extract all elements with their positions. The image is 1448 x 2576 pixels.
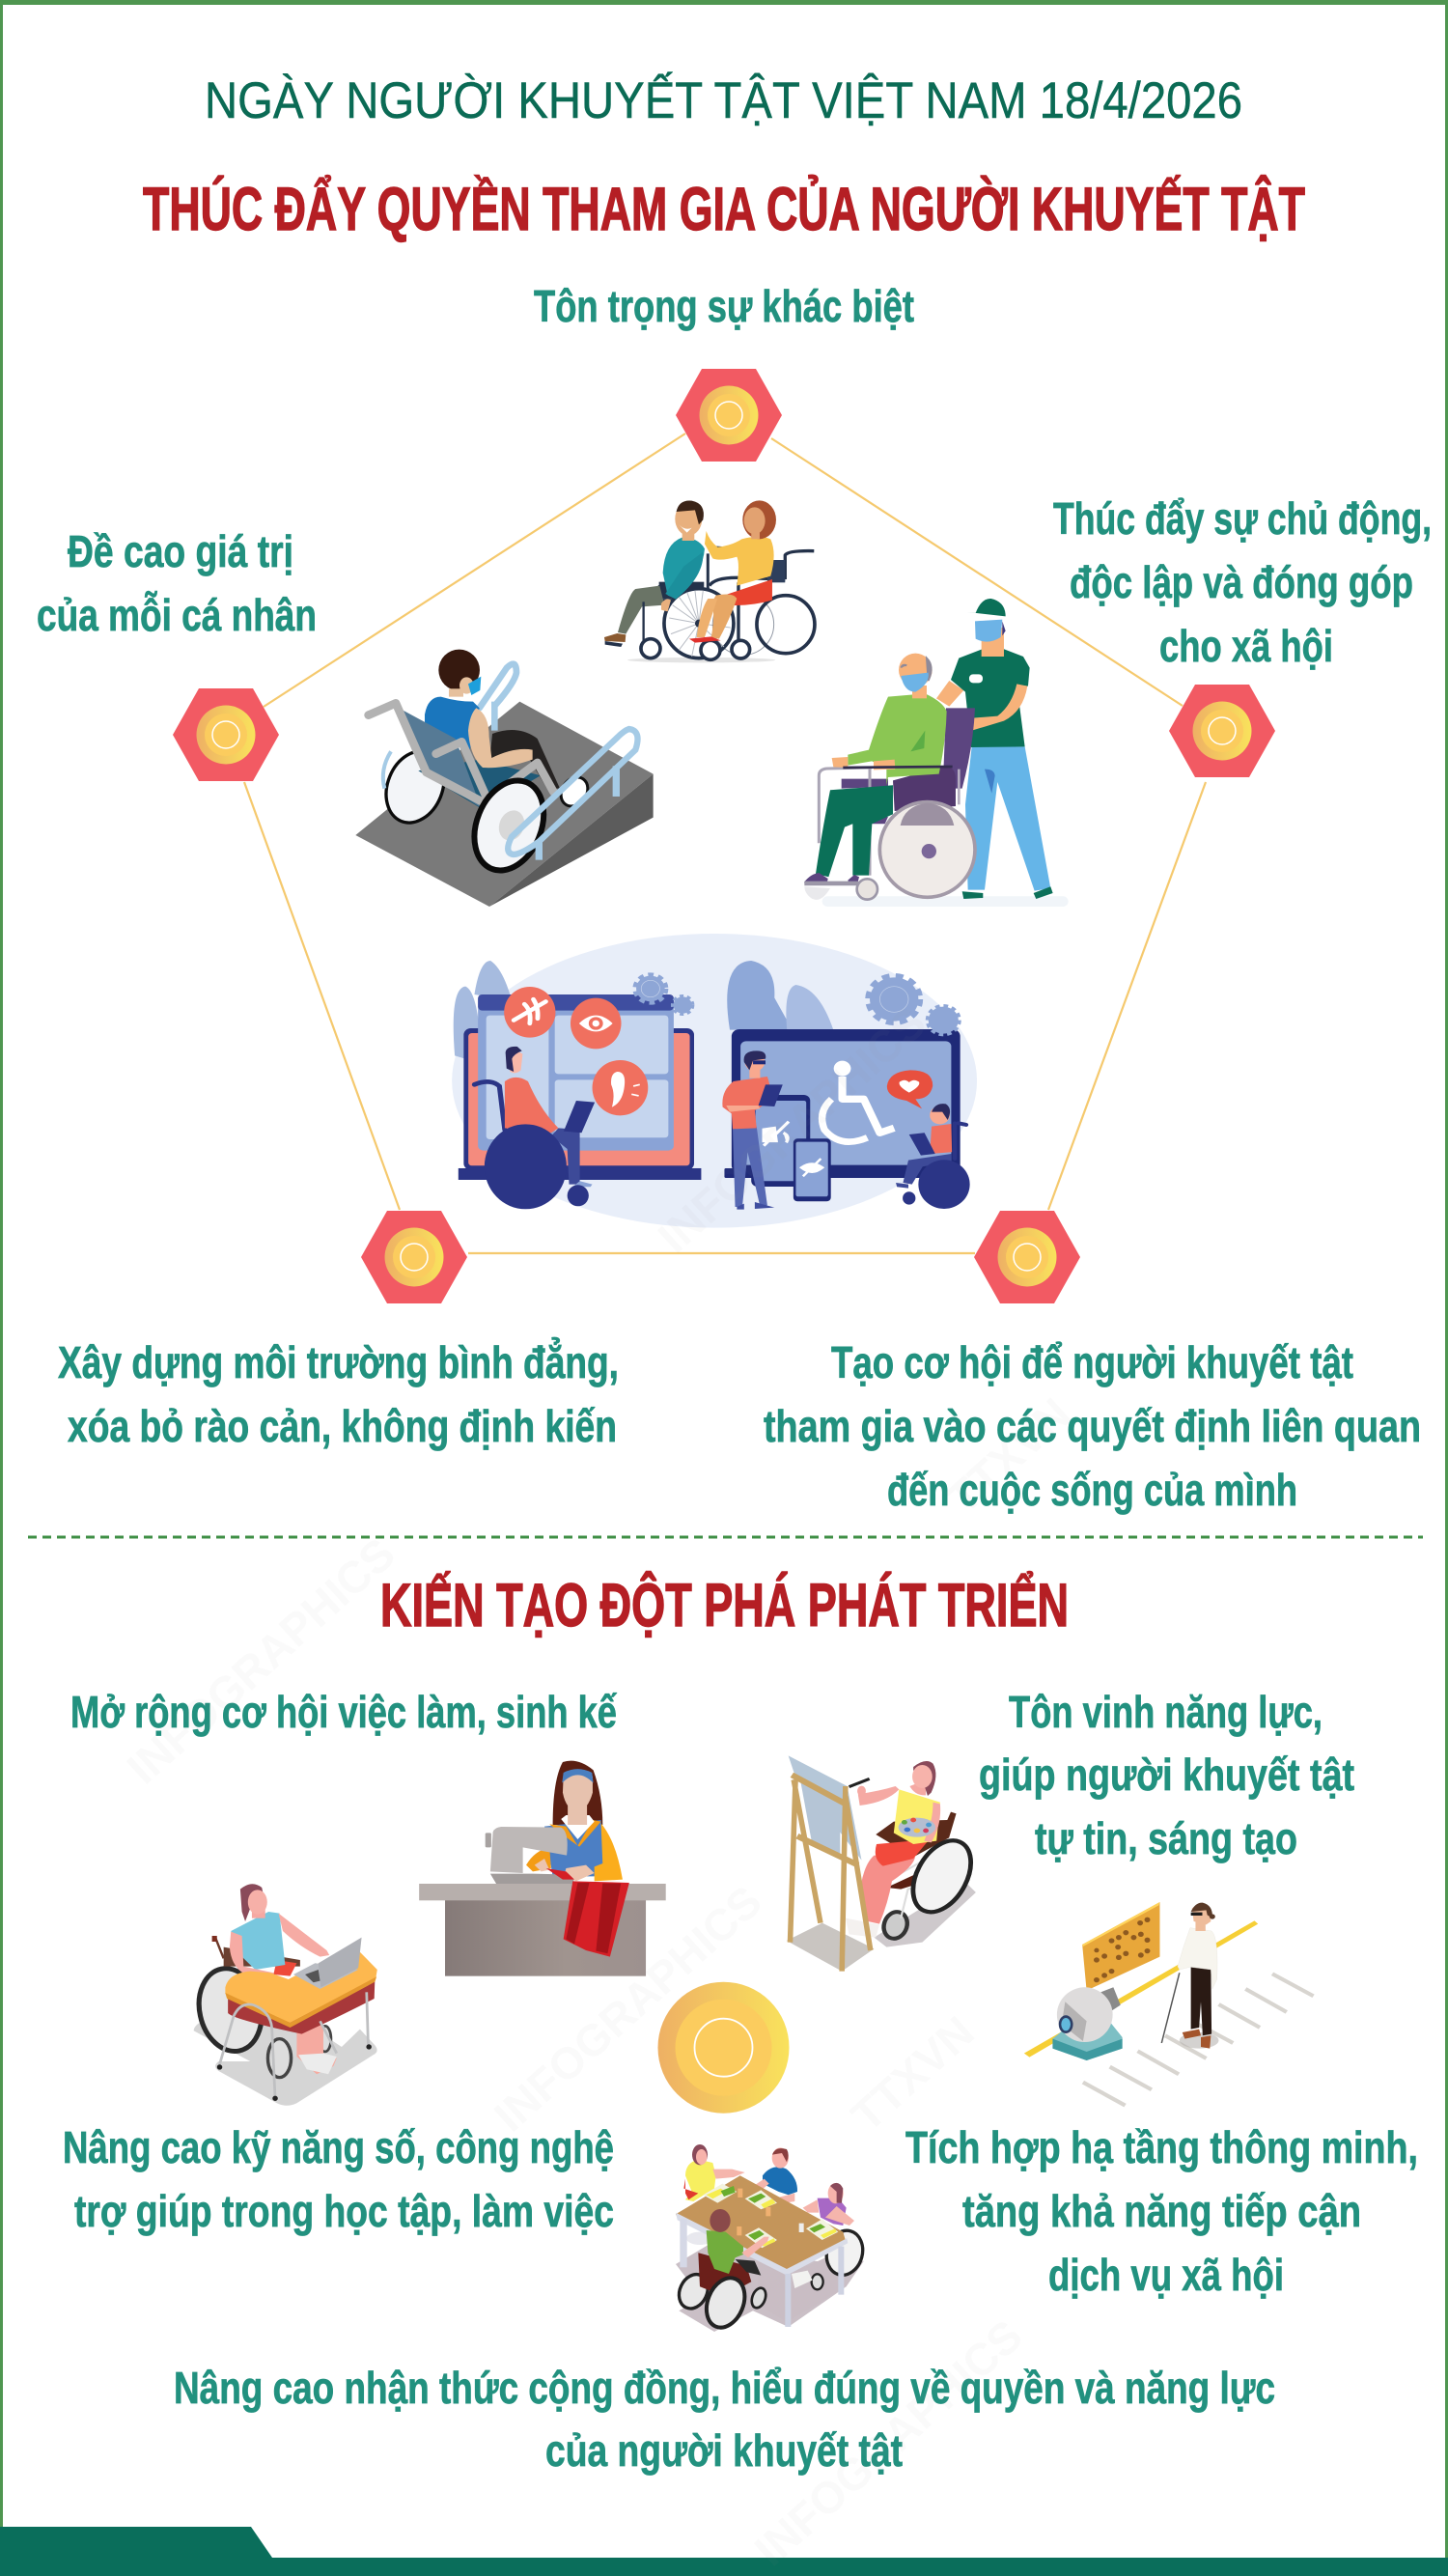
- watermarks: TTXVN: [842, 2006, 984, 2141]
- label: jobs and livelihoods: Mở rộng cơ hội việc làm, sinh kế: [70, 1687, 617, 1737]
- label: digital skills: [63, 2122, 614, 2236]
- label: initiative and independence: cho xã hội: [1159, 621, 1333, 671]
- label: initiative and independence: [1053, 493, 1432, 671]
- label: digital skills: Nâng cao kỹ năng số, công nghệ: [63, 2122, 614, 2172]
- label: smart infrastructure: tăng khả năng tiếp cận: [962, 2186, 1361, 2236]
- label: equal environment: Xây dựng môi trường bình đẳng,: [58, 1336, 619, 1387]
- label: honoring abilities: tự tin, sáng tạo: [1035, 1813, 1297, 1863]
- hexagon node: left: [173, 688, 279, 781]
- label: participation in decisions: [764, 1337, 1421, 1515]
- watermarks: INFOGRAPHICS: [118, 1528, 404, 1793]
- date heading: NGÀY NGƯỜI KHUYẾT TẬT VIỆT NAM 18/4/2026: [205, 71, 1242, 129]
- illustration: woman at sewing machine: [419, 1761, 666, 1976]
- illustration: painter in wheelchair: [787, 1755, 983, 1972]
- illustration: braille board and blind man on tactile path: [1024, 1902, 1314, 2106]
- label: smart infrastructure: [905, 2122, 1418, 2300]
- footer bar: [0, 2527, 1448, 2576]
- label: digital skills: trợ giúp trong học tập, làm việc: [74, 2186, 614, 2236]
- illustration: accessible technology scene: [452, 934, 977, 1228]
- label: equal environment: [58, 1336, 619, 1451]
- illustration: caregiver pushing elderly man: [804, 599, 1069, 907]
- label: value of each individual: của mỗi cá nhân: [37, 590, 317, 640]
- hexagon node: top: [676, 369, 782, 462]
- hexagon node: bottom left: [361, 1211, 467, 1303]
- label: respect differences: Tôn trọng sự khác biệt: [534, 281, 914, 331]
- watermarks: INFOGRAPHICS: [649, 997, 935, 1262]
- label: honoring abilities: giúp người khuyết tật: [979, 1750, 1354, 1800]
- section heading: KIẾN TẠO ĐỘT PHÁ PHÁT TRIỂN: [380, 1571, 1069, 1639]
- watermarks: INFOGRAPHICS: [745, 2310, 1032, 2575]
- watermarks: INFOGRAPHICS: [485, 1876, 771, 2141]
- illustration: woman working on laptop in wheelchair: [191, 1884, 377, 2106]
- pentagon connecting lines: [244, 434, 1206, 1253]
- hexagon node: right: [1169, 685, 1275, 777]
- watermarks: TTXVN: [938, 1388, 1080, 1523]
- label: equal environment: xóa bỏ rào cản, không định kiến: [68, 1401, 617, 1451]
- label: community awareness: [174, 2363, 1275, 2476]
- label: value of each individual: Đề cao giá trị: [68, 526, 293, 576]
- illustration: wheelchair user on ramp: [355, 650, 654, 907]
- label: smart infrastructure: dịch vụ xã hội: [1048, 2250, 1284, 2300]
- label: community awareness: của người khuyết tật: [545, 2425, 903, 2476]
- label: honoring abilities: Tôn vinh năng lực,: [1009, 1687, 1323, 1737]
- label: honoring abilities: [979, 1687, 1354, 1863]
- illustration: group at dining table: [674, 2144, 868, 2334]
- hexagon node: bottom right: [974, 1211, 1080, 1303]
- watermarks: [118, 997, 1080, 2575]
- label: participation in decisions: đến cuộc sống của mình: [887, 1465, 1297, 1515]
- central gold circle: [658, 1982, 790, 2114]
- label: value of each individual: [37, 526, 317, 640]
- dashed section divider: [28, 1535, 1423, 1539]
- illustration: couple in wheelchairs: [604, 500, 815, 662]
